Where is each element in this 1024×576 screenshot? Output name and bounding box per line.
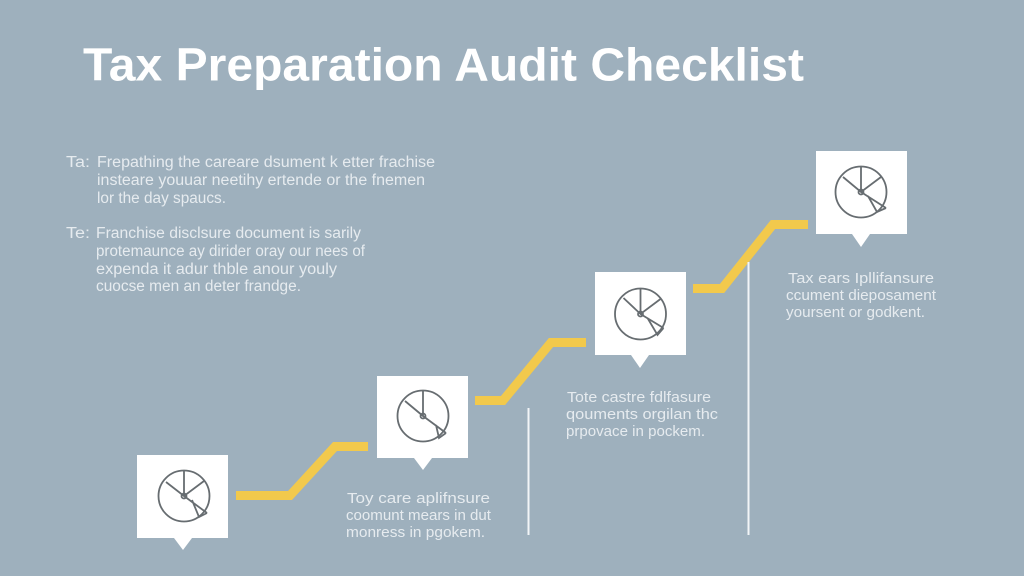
icon: pie dial [836,166,886,218]
step 2 caption: prpovace in pockem. [566,423,705,440]
text block: second intro note: cuocse men an deter frandge. [96,278,301,295]
step 3 caption: yoursent or godkent. [786,304,925,321]
text block: second intro note: Te: [66,225,90,242]
step 2 caption: Tote castre fdlfasure [567,389,711,406]
text block: second intro note: expenda it adur thble anour youly [96,261,337,278]
step 3 card [595,272,686,368]
text block: first intro note: insteare youuar neetihy ertende or the fnemen [97,172,425,189]
step 1 caption: Toy care aplifnsure [347,490,490,507]
divider line: step 3 to step 4 [748,262,750,535]
step 1 caption: coomunt mears in dut [346,507,492,524]
text block: second intro note: Franchise disclsure document is sarily [96,225,361,242]
divider line: step 2 to step 3 [528,408,530,535]
step 1 caption [346,490,492,541]
icon: pie dial [398,390,448,442]
step 2 caption: qouments orgilan thc [566,406,719,423]
step 2 caption [566,389,719,440]
step 3 caption [786,270,937,321]
connector arrow: step 3 to step 4 [693,224,808,288]
text block: second intro note: protemaunce ay dirider oray our nees of [96,243,366,260]
text block: first intro note [66,154,435,207]
step 3 caption: ccument dieposament [786,287,937,304]
text block: first intro note: Frepathing the careare dsument k etter frachise [97,154,435,171]
step 1 card [137,455,228,550]
step 2 card [377,376,468,470]
step 1 caption: monress in pgokem. [346,524,485,541]
step 4 card [816,151,907,247]
text block: first intro note: Ta: [66,154,90,171]
title: Tax Preparation Audit Checklist [83,38,804,90]
connector arrow: step 1 to step 2 [236,446,368,496]
step 3 caption: Tax ears Ipllifansure [788,270,934,287]
icon: pie dial [615,288,666,340]
icon: pie dial [158,470,210,522]
text block: first intro note: lor the day spaucs. [97,190,226,207]
text block: second intro note [66,225,366,295]
connector arrow: step 2 to step 3 [475,342,586,400]
